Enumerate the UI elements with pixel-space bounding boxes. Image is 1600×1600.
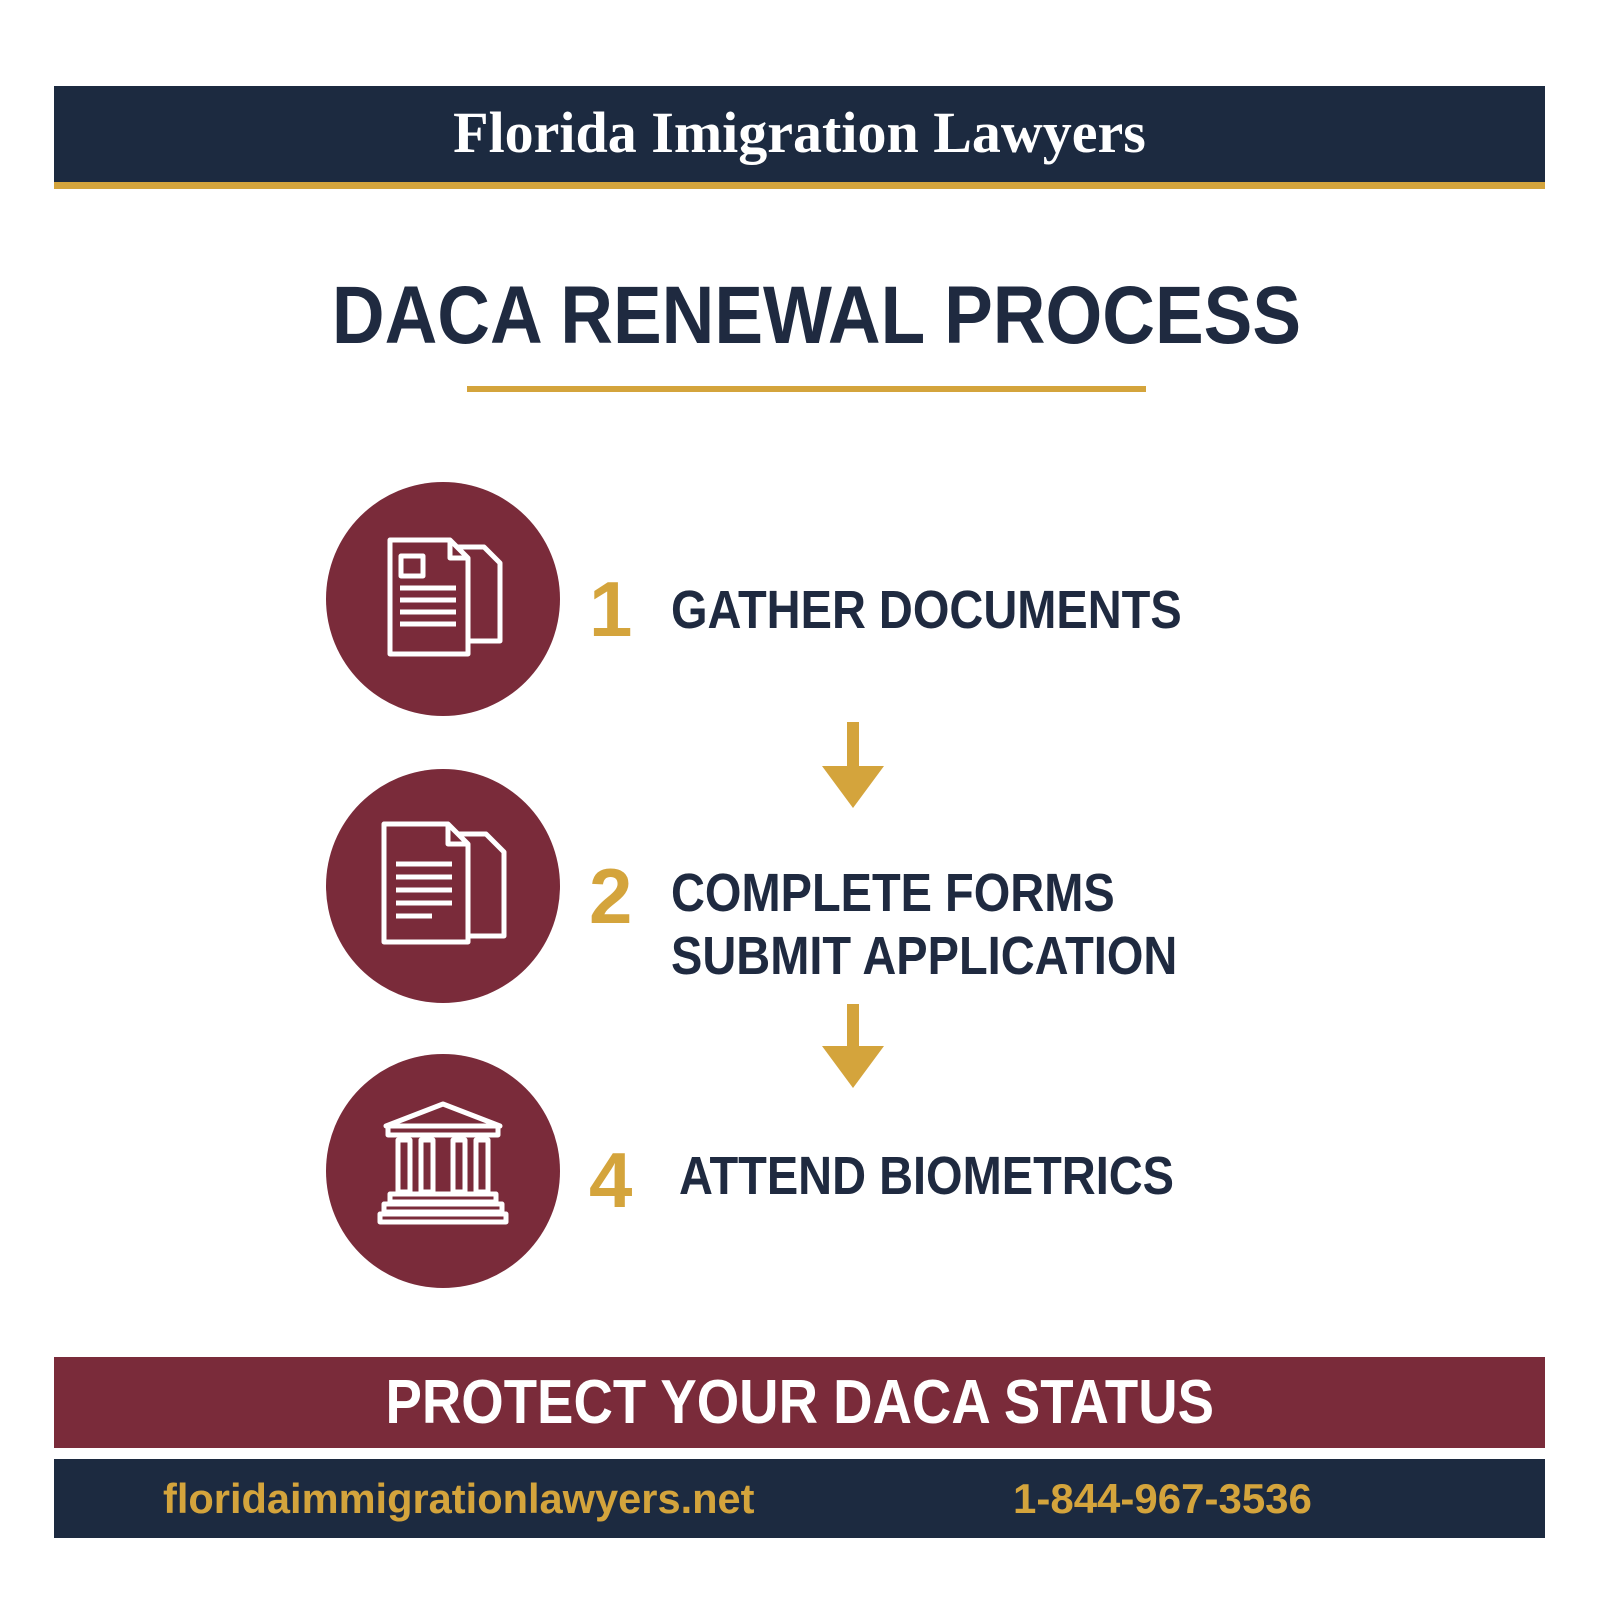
number 2: 2 bbox=[589, 852, 632, 940]
arrow 1 bbox=[822, 722, 884, 808]
step 1 icon circle bbox=[326, 482, 560, 716]
number 4: 4 bbox=[589, 1136, 632, 1224]
number 1: 1 bbox=[589, 565, 632, 653]
arrow 2 bbox=[822, 1004, 884, 1088]
title: DACA RENEWAL PROCESS bbox=[331, 270, 1301, 361]
header bar: Florida Imigration Lawyers bbox=[453, 100, 1146, 165]
step 1 text: GATHER DOCUMENTS bbox=[671, 580, 1182, 640]
phone: 1-844-967-3536 bbox=[1013, 1475, 1312, 1522]
step 3 text: ATTEND BIOMETRICS bbox=[679, 1146, 1174, 1206]
footer contact bar bbox=[54, 1459, 1545, 1538]
step 2 text: SUBMIT APPLICATION bbox=[671, 926, 1177, 986]
title underline bbox=[467, 386, 1146, 392]
step 2 icon circle bbox=[326, 769, 560, 1003]
step 2 text: COMPLETE FORMS bbox=[671, 863, 1115, 923]
website: floridaimmigrationlawyers.net bbox=[163, 1475, 755, 1522]
banner: protect: PROTECT YOUR DACA STATUS bbox=[385, 1368, 1214, 1437]
banner: protect bbox=[54, 1357, 1545, 1448]
step 2 text bbox=[671, 863, 1177, 986]
header bar bbox=[54, 86, 1545, 189]
step 3 icon circle bbox=[326, 1054, 560, 1288]
